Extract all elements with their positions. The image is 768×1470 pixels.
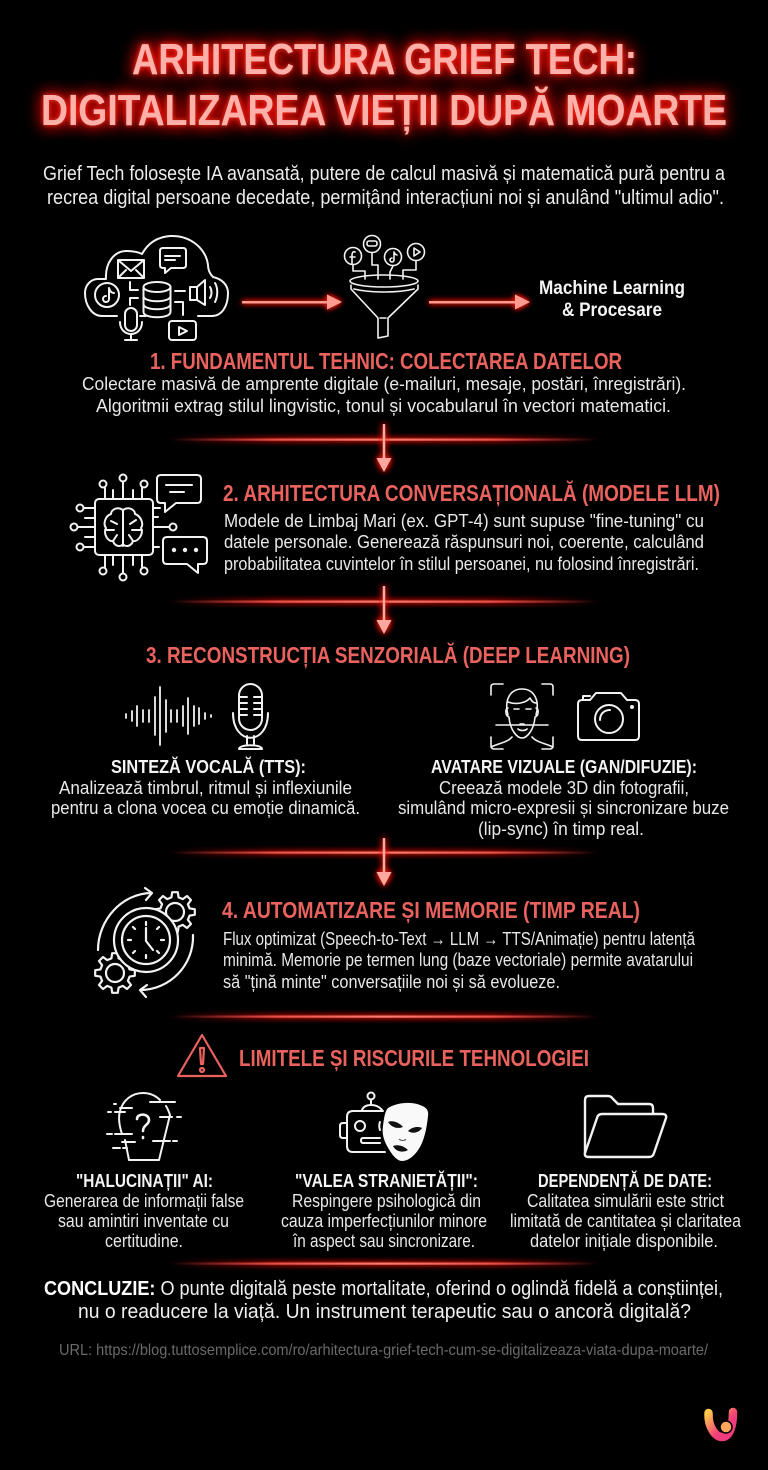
column: hallucinations: "HALUCINAȚII" AI:	[76, 1171, 213, 1191]
column: data dependency: Calitatea simulării este strict	[527, 1191, 724, 1211]
column: data dependency	[510, 1170, 742, 1251]
arrow: cloud to funnel	[242, 294, 342, 310]
conclusion	[44, 1278, 723, 1323]
icon: data cloud	[85, 236, 228, 340]
arrow: funnel to machine learning	[429, 294, 530, 310]
icon: sound wave	[126, 687, 211, 745]
heading 3: 3. RECONSTRUCȚIA SENZORIALĂ (DEEP LEARNING)	[146, 641, 630, 668]
column: uncanny valley: în aspect sau sincronizare.	[292, 1231, 475, 1251]
column: voice synthesis: pentru a clona vocea cu emoție dinamică.	[51, 798, 360, 818]
body 4	[223, 929, 696, 992]
body 2: datele personale. Generează răspunsuri noi, coerente, calculând	[224, 532, 704, 552]
column: uncanny valley: Respingere psihologică din	[292, 1191, 481, 1211]
icon: microphone	[233, 684, 268, 749]
section 2	[223, 479, 720, 574]
arrow down 2	[376, 586, 392, 634]
icon: clock with gears	[95, 888, 195, 997]
label: machine learning	[539, 278, 685, 321]
title	[41, 35, 727, 135]
body 1: Algoritmii extrag stilul lingvistic, tonul și vocabularul în vectori matematici.	[96, 396, 671, 416]
column: visual avatars: Creează modele 3D din fotografii,	[439, 778, 689, 798]
body 2: Modele de Limbaj Mari (ex. GPT-4) sunt supuse "fine-tuning" cu	[224, 511, 704, 531]
column: voice synthesis: Analizează timbrul, ritmul și inflexiunile	[59, 778, 352, 798]
section 4	[222, 897, 696, 992]
column: visual avatars: simulând micro-expresii și sincronizare buze	[398, 798, 729, 818]
column: uncanny valley	[281, 1170, 487, 1251]
icon: filter funnel	[344, 236, 424, 338]
arrow down 1	[376, 424, 392, 472]
icon: folder	[585, 1096, 666, 1157]
conclusion: nu o readucere la viață. Un instrument terapeutic sau o ancoră digitală?	[78, 1301, 691, 1323]
source url: URL: https://blog.tuttosemplice.com/ro/arhitectura-grief-tech-cum-se-digitalizeaza-viata-dupa-moarte/	[59, 1342, 708, 1359]
conclusion: CONCLUZIE: O punte digitală peste mortalitate, oferind o oglindă fidelă a conștiinței,	[44, 1278, 723, 1300]
title: ARHITECTURA GRIEF TECH:	[132, 35, 637, 84]
column: visual avatars: AVATARE VIZUALE (GAN/DIFUZIE):	[431, 757, 697, 777]
label: machine learning: Machine Learning	[539, 278, 685, 299]
body 4: să "țină minte" conversațiile noi și să evolueze.	[223, 972, 560, 992]
icon: robot with mask	[340, 1092, 428, 1161]
column: hallucinations: certitudine.	[105, 1231, 183, 1251]
icon: glitching head	[107, 1093, 181, 1160]
column: uncanny valley: "VALEA STRANIETĂȚII":	[295, 1170, 478, 1191]
label: machine learning: & Procesare	[562, 300, 662, 321]
body 2: probabilitatea cuvintelor în stilul persoanei, nu folosind înregistrări.	[224, 554, 699, 574]
arrow down 3	[376, 838, 392, 886]
logo	[708, 1412, 733, 1437]
column: visual avatars	[398, 757, 729, 839]
icon: warning triangle	[178, 1035, 226, 1076]
heading 4: 4. AUTOMATIZARE ȘI MEMORIE (TIMP REAL)	[222, 897, 640, 924]
icon: face scan	[491, 684, 553, 749]
icon: camera	[578, 693, 639, 740]
body 1: Colectare masivă de amprente digitale (e-mailuri, mesaje, postări, înregistrări).	[82, 374, 686, 394]
column: data dependency: DEPENDENȚĂ DE DATE:	[538, 1170, 712, 1191]
heading 1: 1. FUNDAMENTUL TEHNIC: COLECTAREA DATELOR	[150, 348, 622, 374]
column: voice synthesis	[51, 756, 360, 818]
column: data dependency: limitată de cantitatea și claritatea	[510, 1211, 742, 1231]
body 1	[82, 374, 686, 416]
body 2	[224, 511, 704, 574]
column: data dependency: datelor inițiale disponibile.	[530, 1231, 718, 1251]
body 4: minimă. Memorie pe termen lung (baze vectoriale) permite avatarului	[223, 950, 693, 970]
column: voice synthesis: SINTEZĂ VOCALĂ (TTS):	[111, 756, 306, 777]
column: uncanny valley: cauza imperfecțiunilor minore	[281, 1211, 487, 1231]
column: visual avatars: (lip-sync) în timp real.	[478, 819, 644, 839]
column: hallucinations: Generarea de informații false	[44, 1191, 244, 1211]
intro text	[43, 163, 726, 209]
column: hallucinations	[44, 1171, 244, 1251]
column: hallucinations: sau amintiri inventate cu	[58, 1211, 229, 1231]
section 1	[82, 348, 686, 416]
heading: limits: LIMITELE ȘI RISCURILE TEHNOLOGIEI	[239, 1045, 589, 1072]
icon: AI chip brain with chat	[70, 474, 207, 580]
